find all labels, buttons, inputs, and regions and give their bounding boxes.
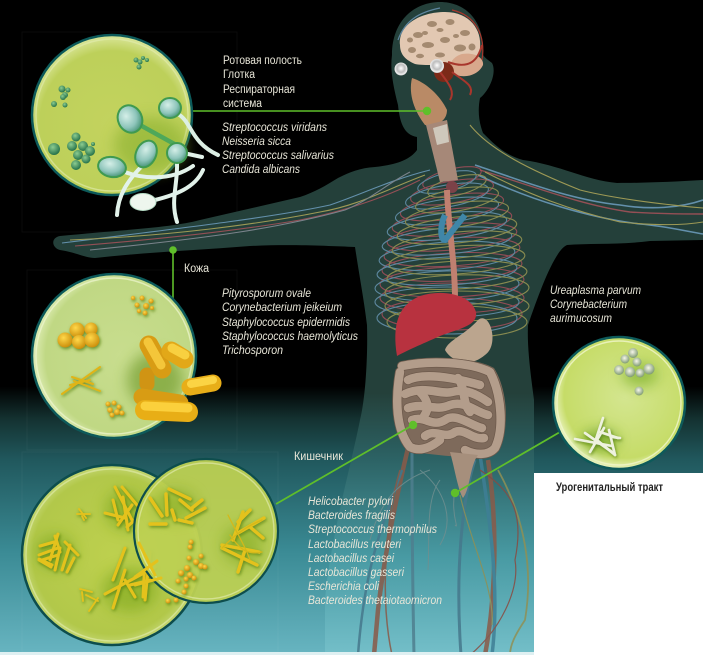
- species list: oral cavity: Streptococcus salivarius: [222, 150, 334, 162]
- species list: oral cavity: Neisseria sicca: [222, 136, 291, 148]
- species list: gut: Lactobacillus casei: [308, 553, 394, 565]
- anatomy: leg vessels: [358, 448, 528, 655]
- bottom strip: [0, 652, 534, 655]
- species list: gut: Escherichia coli: [308, 581, 379, 593]
- petri dish: oral cavity: [32, 35, 218, 222]
- anatomy: liver and stomach: [395, 293, 493, 362]
- label: oral cavity: [223, 55, 302, 110]
- yellow cocci: [58, 296, 154, 418]
- species list: gut: Streptococcus thermophilus: [308, 524, 437, 536]
- species list: gut: Lactobacillus reuteri: [308, 539, 401, 551]
- species list: skin: Trichosporon: [222, 345, 283, 357]
- species list: urogenital: aurimucosum: [550, 313, 612, 325]
- callout line: mouth: [192, 107, 431, 115]
- faint panel frames: [22, 32, 278, 652]
- species list: gut: [308, 496, 442, 607]
- species list: skin: Staphylococcus epidermidis: [222, 317, 350, 329]
- species list: oral cavity: Candida albicans: [222, 164, 300, 176]
- large rods: [142, 342, 213, 412]
- petri dish: urogenital: [553, 337, 685, 469]
- candida tails: [117, 114, 218, 222]
- species list: urogenital: Ureaplasma parvum: [550, 285, 641, 297]
- petri dish: gut, back: [22, 465, 202, 645]
- species list: oral cavity: Streptococcus viridans: [222, 122, 327, 134]
- callout line: skin: [169, 246, 177, 300]
- callout line: gut: [276, 421, 417, 504]
- label: oral cavity: система: [223, 98, 263, 110]
- label: urogenital tract: Урогенитальный тракт: [556, 482, 663, 494]
- species list: oral cavity: [222, 122, 334, 176]
- anatomy: rib cage vessels: [375, 162, 529, 338]
- white corner panel: [534, 473, 703, 655]
- rods seen through lid: [135, 543, 161, 585]
- petri dish: gut, front: [134, 459, 278, 604]
- anatomy: throat and trachea: [411, 78, 465, 300]
- white rods: [575, 418, 620, 455]
- species list: skin: [222, 288, 358, 357]
- species list: skin: Pityrosporum ovale: [222, 288, 311, 300]
- anatomy: nerves and vessels of the arms: [62, 125, 703, 250]
- species list: skin: Corynebacterium jeikeium: [222, 302, 342, 314]
- anatomy: brain: [400, 12, 483, 76]
- candida bulbs: [96, 98, 187, 179]
- species list: urogenital: [550, 285, 641, 325]
- rod colonies: [39, 487, 160, 608]
- anatomy: intestines: [395, 358, 506, 498]
- pearl cocci: [614, 348, 654, 396]
- green cocci clusters: [48, 56, 149, 170]
- species list: gut: Bacteroides thetaiotaomicron: [308, 595, 442, 607]
- petri dish: skin: [32, 274, 213, 438]
- species list: gut: Helicobacter pylori: [308, 496, 393, 508]
- species list: skin: Staphylococcus haemolyticus: [222, 331, 358, 343]
- species list: urogenital: Corynebacterium: [550, 299, 627, 311]
- anatomy: head vessels: [398, 8, 483, 100]
- callout line: urogenital: [451, 432, 560, 497]
- thin rods: [62, 367, 100, 394]
- label: oral cavity: Ротовая полость: [223, 55, 302, 67]
- anatomy: eyes: [394, 59, 444, 76]
- label: oral cavity: Респираторная: [223, 84, 295, 96]
- rod colonies: [150, 489, 264, 572]
- label: skin: Кожа: [184, 263, 210, 275]
- label: oral cavity: Глотка: [223, 69, 256, 81]
- species list: gut: Bacteroides fragilis: [308, 510, 395, 522]
- species list: gut: Lactobacillus gasseri: [308, 567, 404, 579]
- label: gut: Кишечник: [294, 451, 344, 463]
